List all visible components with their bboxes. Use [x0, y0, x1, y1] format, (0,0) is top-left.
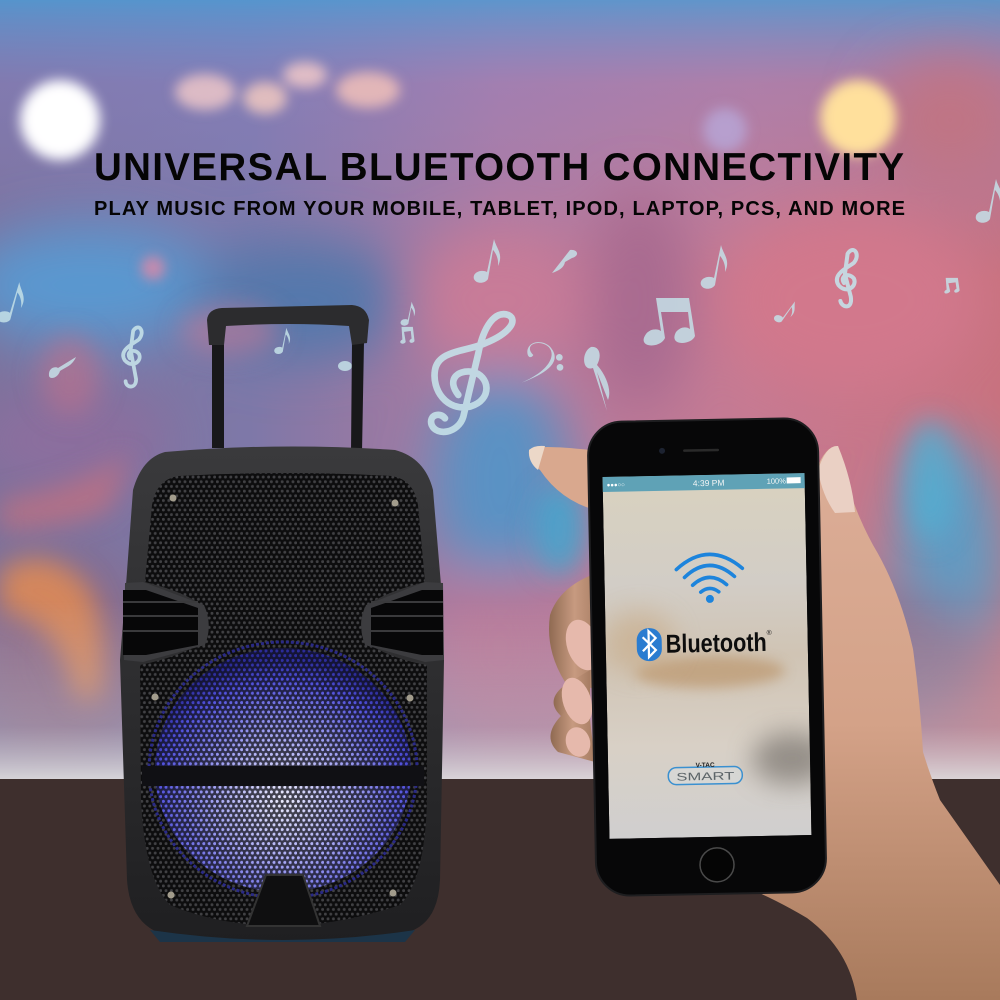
small note: [552, 250, 577, 273]
registered mark: ®: [766, 629, 773, 637]
status bar: 4:39 PM: [693, 478, 725, 488]
small note behind handle: [274, 328, 290, 354]
status bar: [603, 473, 805, 492]
bluetooth label: Bluetooth: [665, 627, 767, 659]
blurred concert background: [0, 0, 1000, 780]
phone: [587, 418, 835, 896]
status bar: 100%: [767, 476, 786, 486]
status bar: ●●●○○: [607, 483, 625, 489]
thumb and wrist: [757, 446, 1000, 1000]
heading: UNIVERSAL BLUETOOTH CONNECTIVITY: [94, 146, 904, 189]
small treble clef right: [837, 250, 857, 306]
index finger: [529, 447, 595, 510]
tilted note: [584, 347, 609, 411]
home button: [700, 848, 734, 882]
phone screen: [602, 473, 833, 839]
woofer: [149, 642, 417, 898]
index finger nail: [529, 446, 545, 470]
speaker body: [120, 446, 444, 942]
phone top details: [659, 447, 719, 454]
grille: [140, 473, 427, 926]
small note behind handle: [338, 361, 352, 371]
left vent: [123, 582, 209, 662]
small note: [49, 357, 76, 378]
speaker handle: [207, 305, 369, 452]
front foot: [247, 875, 320, 926]
v-tac smart logo: [668, 761, 742, 785]
small beamed note: [944, 278, 960, 294]
lower fingers: [549, 572, 600, 762]
edge note: [976, 179, 1000, 223]
edge note: [0, 280, 25, 324]
subheading: PLAY MUSIC FROM YOUR MOBILE, TABLET, IPOD, LAPTOP, PCS, AND MORE: [94, 198, 905, 220]
hand and phone: [529, 418, 1000, 1000]
eighth note: [474, 239, 500, 283]
thumb nail: [818, 446, 855, 513]
grille screws: [152, 494, 414, 898]
base glow: [150, 930, 415, 942]
finger nails: [556, 615, 606, 760]
floating music notes: [0, 179, 1000, 432]
phone body: [587, 418, 827, 896]
treble clef large: [431, 314, 512, 432]
speaker: [120, 305, 444, 942]
floor: [0, 779, 1000, 1000]
eighth note: [701, 245, 727, 289]
v-tac smart logo: SMART: [676, 770, 735, 784]
beamed note: [644, 298, 695, 345]
wifi icon: [676, 554, 743, 602]
bluetooth badge: [636, 628, 662, 661]
small treble clef left: [123, 327, 142, 387]
v-tac smart logo: V-TAC: [696, 762, 715, 769]
small note: [773, 296, 798, 327]
centre strap: [142, 766, 424, 786]
right vent: [361, 582, 444, 662]
small note: [401, 302, 415, 326]
small beamed note: [400, 327, 415, 344]
bass clef: [522, 342, 563, 383]
